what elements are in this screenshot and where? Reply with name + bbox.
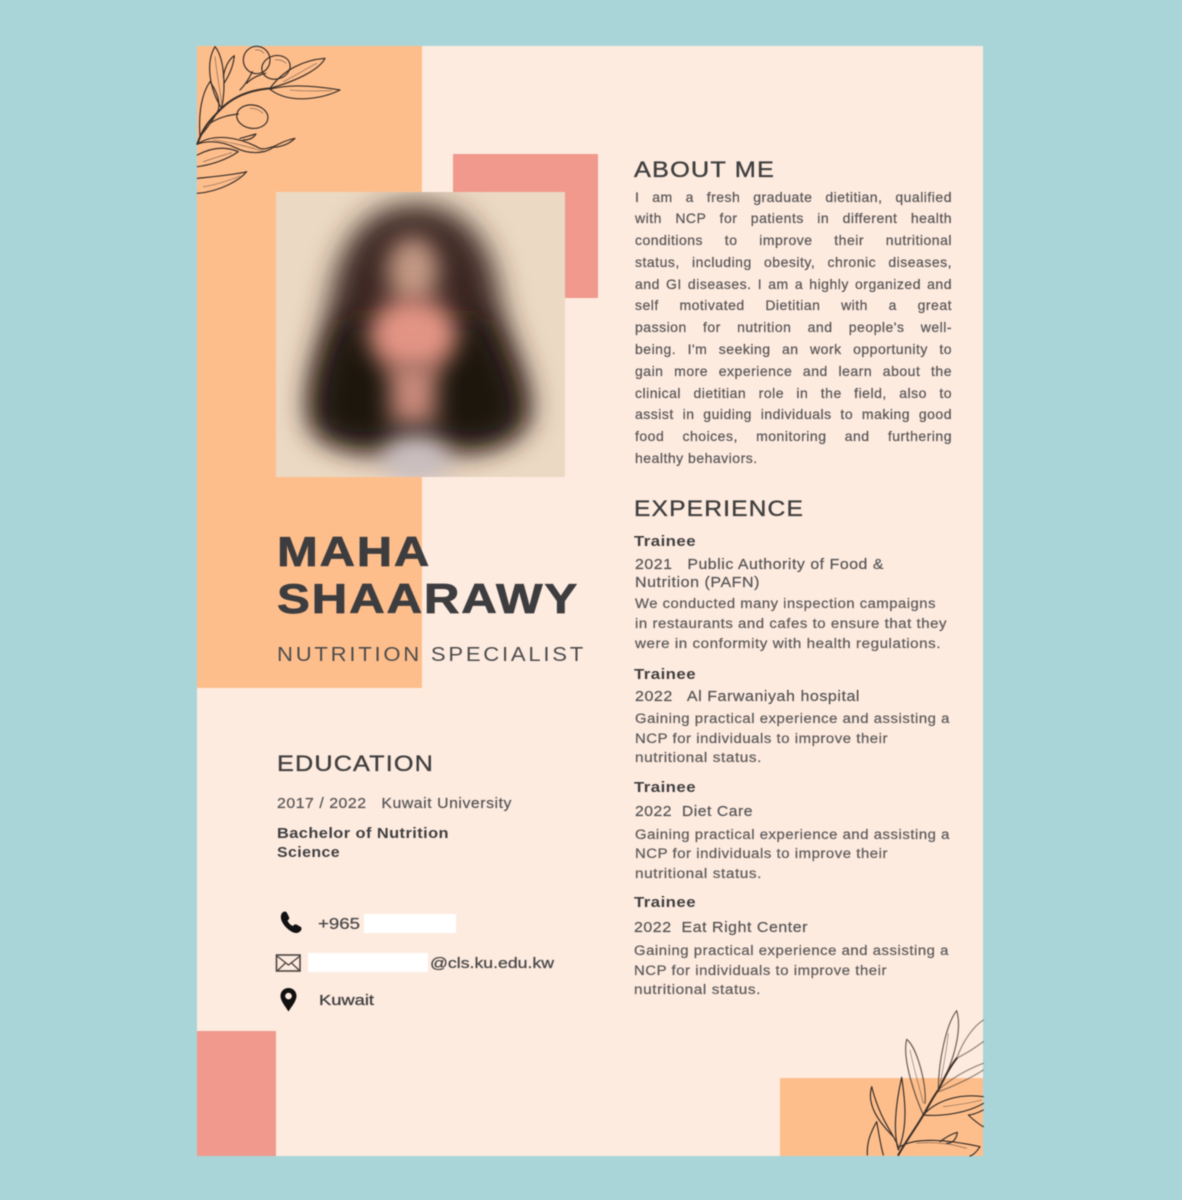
orange left panel <box>197 46 422 688</box>
about me paragraph: I am a fresh graduate dietitian, qualified <box>635 188 952 204</box>
experience 3: Gaining practical experience and assisting a <box>635 827 950 842</box>
experience 1: in restaurants and cafes to ensure that they <box>635 616 947 631</box>
education section: Science <box>277 844 340 861</box>
experience 3: NCP for individuals to improve their <box>635 846 888 861</box>
experience 4: nutritional status. <box>634 982 761 997</box>
experience 1: 2021 Public Authority of Food & <box>635 557 884 573</box>
experience 1: Nutrition (PAFN) <box>635 575 760 591</box>
illustration: bottom right leaves <box>867 1011 983 1156</box>
about me paragraph: assist in guiding individuals to making good <box>635 406 952 422</box>
experience 1: Trainee <box>634 533 696 550</box>
experience 2: nutritional status. <box>635 750 762 765</box>
about me heading: ABOUT ME <box>634 157 775 182</box>
about me paragraph <box>634 188 952 467</box>
about me paragraph: with NCP for patients in different health <box>635 210 952 226</box>
about me paragraph: and GI diseases. I am a highly organized and <box>635 276 952 292</box>
experience 4 <box>634 894 949 997</box>
pink corner block <box>197 1031 276 1156</box>
about me paragraph: conditions to improve their nutritional <box>635 232 952 248</box>
orange corner block <box>780 1078 983 1156</box>
experience 1: We conducted many inspection campaigns <box>635 596 936 611</box>
education section: 2017 / 2022 Kuwait University <box>277 796 512 812</box>
experience 4: Trainee <box>634 894 696 911</box>
experience 2: Gaining practical experience and assisting a <box>635 711 950 726</box>
about me paragraph: gain more experience and learn about the <box>635 363 952 379</box>
job title: NUTRITION SPECIALIST <box>277 644 586 666</box>
education section: EDUCATION <box>277 751 434 776</box>
blurred portrait photo <box>276 192 565 484</box>
pink square behind photo <box>453 154 598 298</box>
experience 3 <box>634 779 950 881</box>
experience 4: Gaining practical experience and assisting a <box>634 943 949 958</box>
contact: location: Kuwait <box>319 992 375 1009</box>
about me paragraph: being. I'm seeking an work opportunity to <box>635 341 952 357</box>
about me paragraph: self motivated Dietitian with a great <box>635 297 952 313</box>
experience 4: 2022 Eat Right Center <box>634 920 808 936</box>
about me paragraph: status, including obesity, chronic diseases, <box>635 254 952 270</box>
experience 2: Trainee <box>634 666 696 683</box>
education section: Bachelor of Nutrition <box>277 825 449 842</box>
experience 1 <box>634 533 947 651</box>
about me paragraph: food choices, monitoring and furthering <box>635 428 952 444</box>
experience 3: 2022 Diet Care <box>635 804 753 820</box>
experience 2 <box>634 666 950 765</box>
contact: email <box>276 953 554 972</box>
illustration: top left olive branch <box>197 46 340 193</box>
education section <box>277 751 512 861</box>
contact: phone <box>281 912 456 933</box>
contact: location <box>280 988 375 1012</box>
name: SHAARAWY <box>277 575 579 622</box>
resume page background <box>197 46 983 1156</box>
about me paragraph: clinical dietitian role in the field, also to <box>635 385 952 401</box>
experience 3: Trainee <box>634 779 696 796</box>
experience 3: nutritional status. <box>635 866 762 881</box>
experience 2: 2022 Al Farwaniyah hospital <box>635 689 860 705</box>
name: MAHA <box>277 528 431 575</box>
contact: email: @cls.ku.edu.kw <box>430 955 554 972</box>
experience 2: NCP for individuals to improve their <box>635 731 888 746</box>
about me paragraph: passion for nutrition and people's well- <box>635 319 952 335</box>
experience section <box>634 496 950 997</box>
contact: phone: +965 <box>318 916 360 933</box>
experience 4: NCP for individuals to improve their <box>634 963 887 978</box>
experience 1: were in conformity with health regulations. <box>634 636 941 651</box>
name <box>277 528 579 622</box>
about me paragraph: healthy behaviors. <box>635 450 758 466</box>
experience section: EXPERIENCE <box>634 496 804 521</box>
